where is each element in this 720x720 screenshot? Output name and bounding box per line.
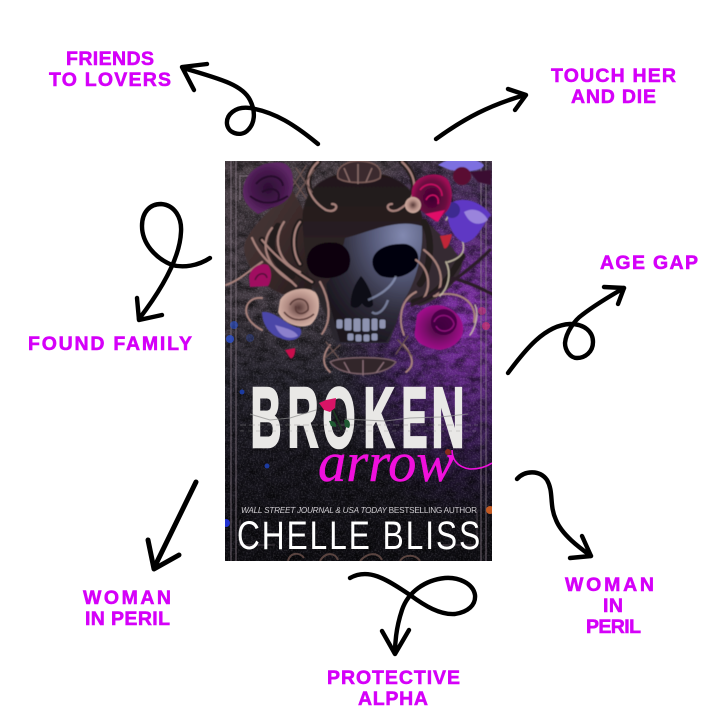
skull cheek highlight — [368, 276, 396, 314]
bokeh lights — [222, 307, 494, 527]
label: touch her and die: TOUCH HER — [551, 65, 676, 87]
fine grain — [225, 161, 492, 561]
title: BROKEN: B — [250, 371, 282, 466]
scrollwork dark — [262, 162, 462, 302]
label: woman in peril left — [83, 587, 171, 630]
title: BROKEN — [252, 386, 462, 450]
tagline: WALL STREET JOURNAL & USA TODAY BESTSELLING AUTHOR — [241, 506, 477, 515]
rosebud — [285, 348, 295, 358]
bronze ornament — [226, 162, 492, 372]
label: woman in peril right: WOMAN — [565, 574, 654, 596]
label: protective alpha: ALPHA — [358, 688, 428, 710]
eye socket left — [307, 242, 350, 278]
skull — [302, 172, 423, 343]
author name: CHELLE BLISS — [237, 514, 480, 558]
arrow: friends to lovers — [182, 64, 318, 144]
cover background — [225, 161, 492, 561]
label: age gap: AGE GAP — [600, 252, 698, 274]
book cover — [222, 158, 494, 561]
rose: blush pink — [278, 289, 319, 327]
label: friends to lovers: TO LOVERS — [49, 69, 171, 91]
title: arrow script — [319, 450, 492, 482]
arrow: found family — [137, 204, 210, 320]
bottom shell ornament — [330, 358, 396, 376]
rosebud right — [440, 234, 452, 248]
title: BROKEN: K — [364, 371, 394, 466]
title: BROKEN: N — [432, 371, 464, 466]
arrow: woman in peril left — [148, 482, 196, 569]
scroll cream accents — [438, 216, 478, 336]
label: friends to lovers: FRIENDS — [66, 48, 154, 70]
label: woman in peril right: IN — [603, 595, 623, 617]
scrollwork light — [226, 162, 475, 372]
arrow flourish — [452, 450, 492, 469]
label: woman in peril right — [565, 574, 654, 638]
arrow: woman in peril right — [517, 472, 591, 558]
dark thorn branches — [412, 250, 492, 305]
lattice detail — [288, 166, 412, 360]
purple glow — [352, 161, 492, 502]
label: friends to lovers — [49, 48, 171, 91]
top shell ornament — [338, 161, 381, 184]
title rose — [319, 398, 350, 430]
teeth — [336, 318, 386, 342]
rose: magenta — [415, 305, 463, 350]
rose: small crimson — [249, 264, 271, 287]
rose: dark purple — [243, 162, 293, 214]
arrow: touch her and die — [436, 89, 526, 139]
label: woman in peril right: PERIL — [586, 616, 641, 638]
title: BROKEN: R — [288, 371, 318, 466]
flowers purple-blue — [262, 158, 491, 340]
eye socket right — [372, 244, 418, 278]
decorative frame — [231, 161, 486, 561]
right bronze mass — [404, 225, 462, 306]
label: woman in peril left: WOMAN — [83, 587, 171, 609]
label: protective alpha — [327, 667, 460, 710]
nose cavity — [351, 276, 373, 308]
left bronze mass — [244, 190, 312, 297]
title: BROKEN: E — [402, 371, 428, 466]
title crack band — [240, 410, 478, 431]
title: BROKEN: O — [322, 371, 356, 466]
dark mottling — [225, 161, 492, 561]
skull lit side — [326, 224, 422, 342]
bottom ornament — [288, 554, 420, 561]
skull cranium — [302, 172, 423, 343]
label: touch her and die: AND DIE — [571, 86, 656, 108]
label: protective alpha: PROTECTIVE — [327, 667, 460, 689]
label: touch her and die — [551, 65, 676, 108]
arrow: protective alpha — [350, 574, 475, 654]
rose: red — [405, 174, 452, 222]
cover artwork — [226, 158, 492, 376]
arrow: age gap — [508, 287, 624, 373]
title: arrow script: arrow — [318, 432, 454, 494]
label: found family: FOUND FAMILY — [28, 333, 192, 355]
label: woman in peril left: IN PERIL — [85, 608, 170, 630]
